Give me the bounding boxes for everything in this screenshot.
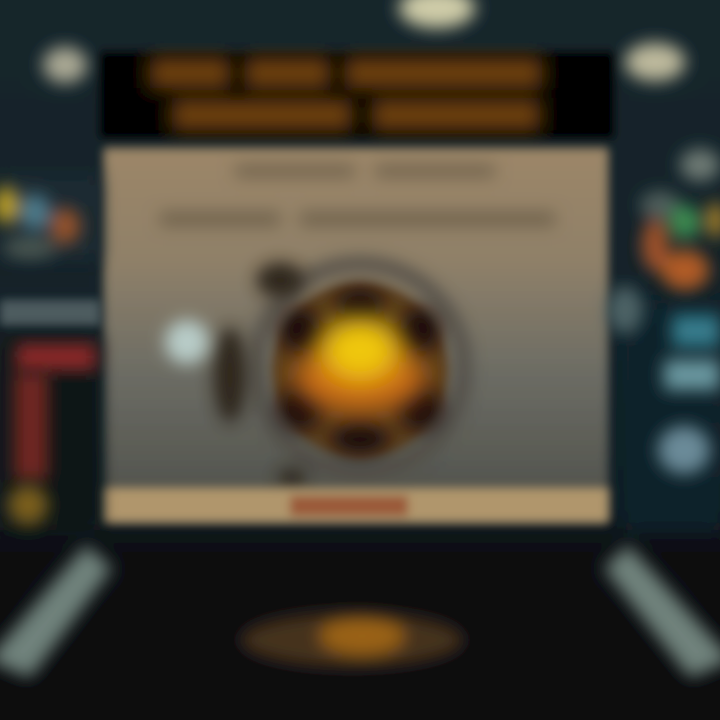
panel: header band <box>100 52 614 138</box>
left red column <box>14 372 48 480</box>
panel: right column <box>607 149 720 530</box>
left arcs <box>213 262 306 488</box>
left color chart <box>0 187 80 258</box>
left dark panel <box>0 335 100 530</box>
panel: left column <box>0 175 100 530</box>
board text lines <box>160 165 555 226</box>
left red banner <box>16 344 96 370</box>
diagonal light beams <box>0 545 720 678</box>
panel: bottom strip <box>104 488 608 522</box>
icon: central gear <box>213 262 464 488</box>
core <box>320 318 400 382</box>
core glow <box>294 344 426 412</box>
right color chart <box>640 149 720 290</box>
right teal bars <box>607 286 720 474</box>
header title lines <box>150 58 542 130</box>
small glowing orb <box>165 320 209 364</box>
ceiling lights <box>43 0 685 83</box>
gear disc <box>272 282 448 458</box>
outer ring <box>256 264 464 472</box>
panel: main board <box>104 148 608 522</box>
gear spokes <box>278 288 442 454</box>
left gray band <box>0 300 100 326</box>
floor emblem <box>240 612 464 668</box>
left yellow mark <box>8 485 48 525</box>
